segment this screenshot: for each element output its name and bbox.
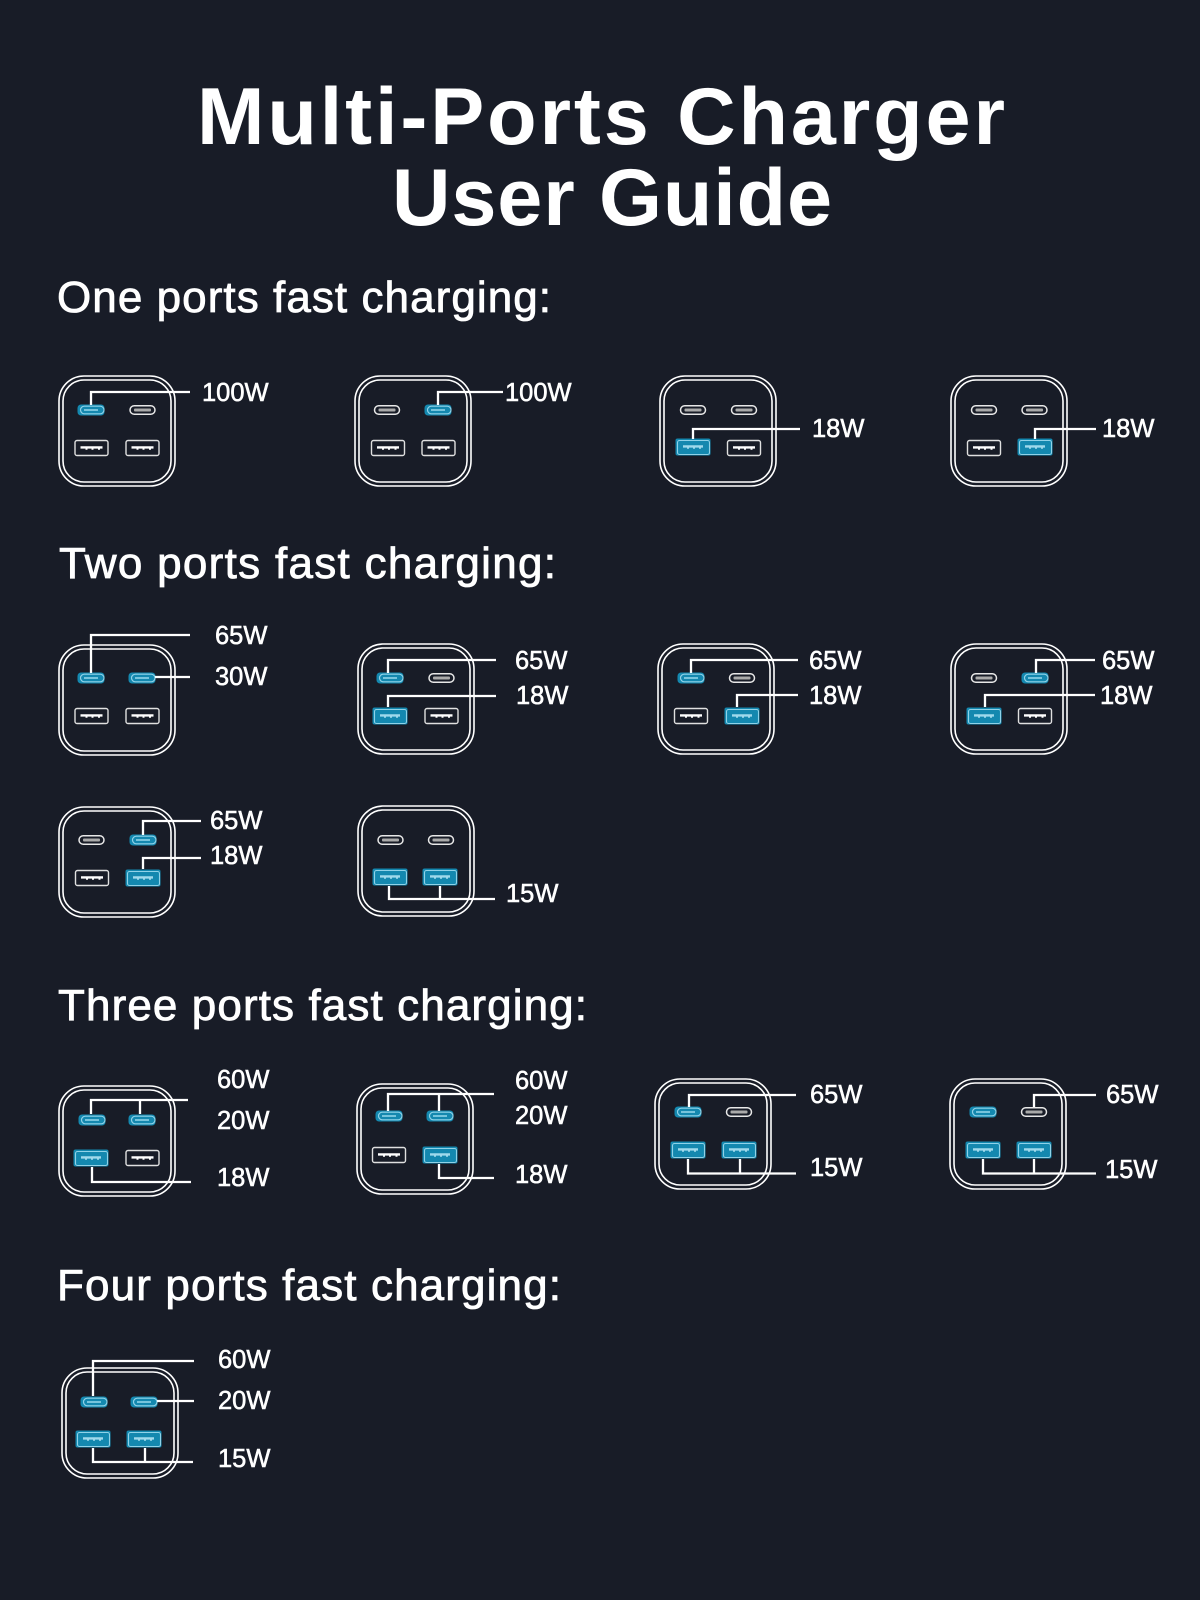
label: 100W: 100W — [202, 379, 269, 407]
charger: two ports, left USB-C 65W + left USB-A 18W — [358, 644, 568, 754]
label: 60W: 60W — [218, 1346, 270, 1374]
title — [197, 72, 1005, 243]
label: 65W: 65W — [809, 647, 861, 675]
label: 15W: 15W — [810, 1154, 862, 1182]
heading: two ports: Two ports fast charging: — [59, 539, 556, 588]
charger: three ports, USB-C 60W + 20W, right USB-A 18W — [357, 1067, 567, 1194]
label: 65W: 65W — [210, 807, 262, 835]
charger: two ports, right USB-C 65W + right USB-A 18W — [59, 807, 262, 917]
charger: two ports, right USB-C 65W + left USB-A 18W — [951, 644, 1154, 754]
label: 65W: 65W — [215, 622, 267, 650]
label: 18W: 18W — [812, 415, 864, 443]
label: 20W: 20W — [217, 1107, 269, 1135]
heading: four ports: Four ports fast charging: — [57, 1261, 561, 1310]
label: 15W: 15W — [506, 880, 558, 908]
charger: three ports, USB-C 65W, both USB-A 15W — [655, 1079, 862, 1189]
charger: two ports, left USB-C 65W + right USB-A 18W — [658, 644, 861, 754]
label: 18W: 18W — [210, 842, 262, 870]
label: 65W: 65W — [1106, 1081, 1158, 1109]
label: 100W: 100W — [505, 379, 572, 407]
charger: one port, left USB-A 18W — [660, 376, 864, 486]
label: 20W: 20W — [515, 1102, 567, 1130]
label: 18W: 18W — [1100, 682, 1152, 710]
charger: one port, right USB-A 18W — [951, 376, 1154, 486]
title: Multi-Ports Charger — [197, 72, 1005, 162]
heading: one port: One ports fast charging: — [57, 273, 551, 322]
label: 65W: 65W — [515, 647, 567, 675]
label: 18W: 18W — [809, 682, 861, 710]
charger: three ports, USB-C 60W + 20W, left USB-A 18W — [59, 1066, 269, 1196]
title: User Guide — [392, 153, 832, 243]
charger: three ports, USB-C 65W, both USB-A 15W (right) — [950, 1079, 1158, 1189]
heading: three ports: Three ports fast charging: — [58, 981, 587, 1030]
label: 18W: 18W — [515, 1161, 567, 1189]
label: 18W: 18W — [1102, 415, 1154, 443]
label: 15W: 15W — [1105, 1156, 1157, 1184]
label: 60W: 60W — [217, 1066, 269, 1094]
label: 60W: 60W — [515, 1067, 567, 1095]
label: 65W: 65W — [1102, 647, 1154, 675]
label: 30W: 30W — [215, 663, 267, 691]
charger: two ports, both USB-A 15W — [358, 806, 558, 916]
label: 15W: 15W — [218, 1445, 270, 1473]
charger: one port, right USB-C 100W — [355, 376, 572, 486]
charger: one port, left USB-C 100W — [59, 376, 269, 486]
label: 20W: 20W — [218, 1387, 270, 1415]
label: 18W: 18W — [217, 1164, 269, 1192]
charger: four ports, USB-C 60W + 20W, USB-A 15W — [62, 1346, 270, 1478]
label: 65W: 65W — [810, 1081, 862, 1109]
charger: two ports, USB-C 65W + USB-C 30W — [59, 622, 267, 755]
label: 18W: 18W — [516, 682, 568, 710]
